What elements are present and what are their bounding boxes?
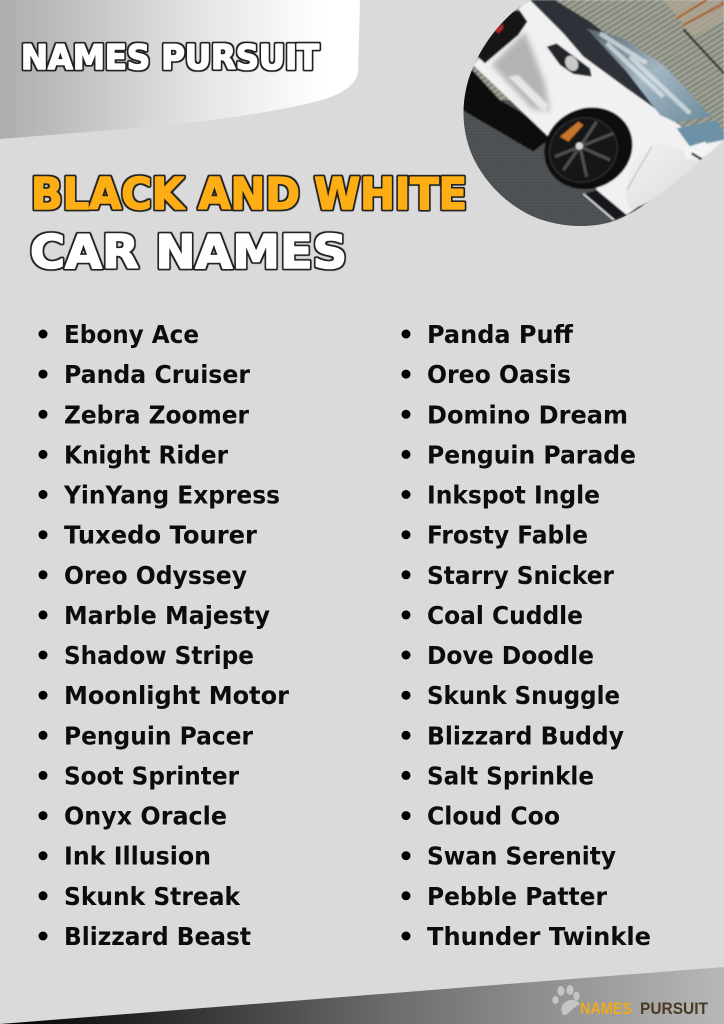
title — [30, 170, 467, 279]
corrugated wall — [472, 0, 724, 134]
item: Knight Rider: Knight Rider — [64, 440, 229, 469]
right column — [402, 320, 651, 951]
item: Onyx Oracle: Onyx Oracle — [64, 802, 227, 831]
item: Penguin Parade: Penguin Parade — [427, 440, 636, 469]
side skirt — [582, 190, 627, 220]
item: Soot Sprinter: Soot Sprinter — [64, 761, 240, 790]
top banner — [0, 0, 360, 139]
title line 1: BLACK AND WHITE — [31, 170, 467, 220]
title line 2: CAR NAMES — [30, 225, 347, 279]
road — [464, 99, 650, 226]
circular car photo — [450, 0, 724, 233]
item: Frosty Fable: Frosty Fable — [427, 521, 588, 550]
item: Blizzard Beast: Blizzard Beast — [64, 922, 251, 951]
car body — [457, 0, 724, 215]
item: Domino Dream: Domino Dream — [427, 400, 628, 429]
headlight — [547, 43, 592, 77]
item: Swan Serenity: Swan Serenity — [427, 842, 616, 871]
item: Salt Sprinkle: Salt Sprinkle — [427, 761, 594, 790]
footer logo — [552, 985, 709, 1018]
item: Dove Doodle: Dove Doodle — [427, 641, 594, 670]
item: Moonlight Motor: Moonlight Motor — [64, 681, 290, 710]
item: Panda Puff: Panda Puff — [427, 320, 574, 349]
item: Oreo Oasis: Oreo Oasis — [427, 360, 571, 389]
item: Penguin Pacer: Penguin Pacer — [64, 721, 254, 750]
item: Ebony Ace: Ebony Ace — [64, 320, 199, 349]
footer band — [0, 967, 724, 1024]
item: Tuxedo Tourer: Tuxedo Tourer — [64, 521, 258, 550]
names list — [38, 320, 651, 951]
item: YinYang Express: YinYang Express — [63, 480, 280, 510]
item: Ink Illusion: Ink Illusion — [64, 842, 211, 871]
item: Starry Snicker: Starry Snicker — [427, 561, 615, 590]
item: Skunk Streak: Skunk Streak — [64, 882, 241, 911]
windshield — [530, 0, 724, 159]
icon: paw — [552, 985, 580, 1015]
left column — [38, 320, 290, 951]
front wheel — [544, 106, 634, 190]
item: Shadow Stripe: Shadow Stripe — [64, 641, 254, 670]
item: Oreo Odyssey: Oreo Odyssey — [64, 561, 247, 590]
item: Thunder Twinkle: Thunder Twinkle — [427, 922, 651, 951]
item: Panda Cruiser: Panda Cruiser — [64, 360, 251, 389]
logo word: PURSUIT: PURSUIT — [640, 999, 709, 1018]
brand heading: NAMES PURSUIT — [21, 38, 319, 77]
item: Inkspot Ingle: Inkspot Ingle — [427, 480, 600, 510]
item: Coal Cuddle: Coal Cuddle — [427, 601, 583, 630]
item: Blizzard Buddy: Blizzard Buddy — [427, 721, 624, 750]
logo word: NAMES: NAMES — [580, 999, 632, 1018]
item: Pebble Patter: Pebble Patter — [427, 882, 608, 911]
item: Zebra Zoomer: Zebra Zoomer — [64, 400, 250, 429]
item: Cloud Coo: Cloud Coo — [427, 802, 560, 831]
item: Marble Majesty: Marble Majesty — [64, 601, 270, 630]
item: Skunk Snuggle: Skunk Snuggle — [427, 681, 620, 710]
